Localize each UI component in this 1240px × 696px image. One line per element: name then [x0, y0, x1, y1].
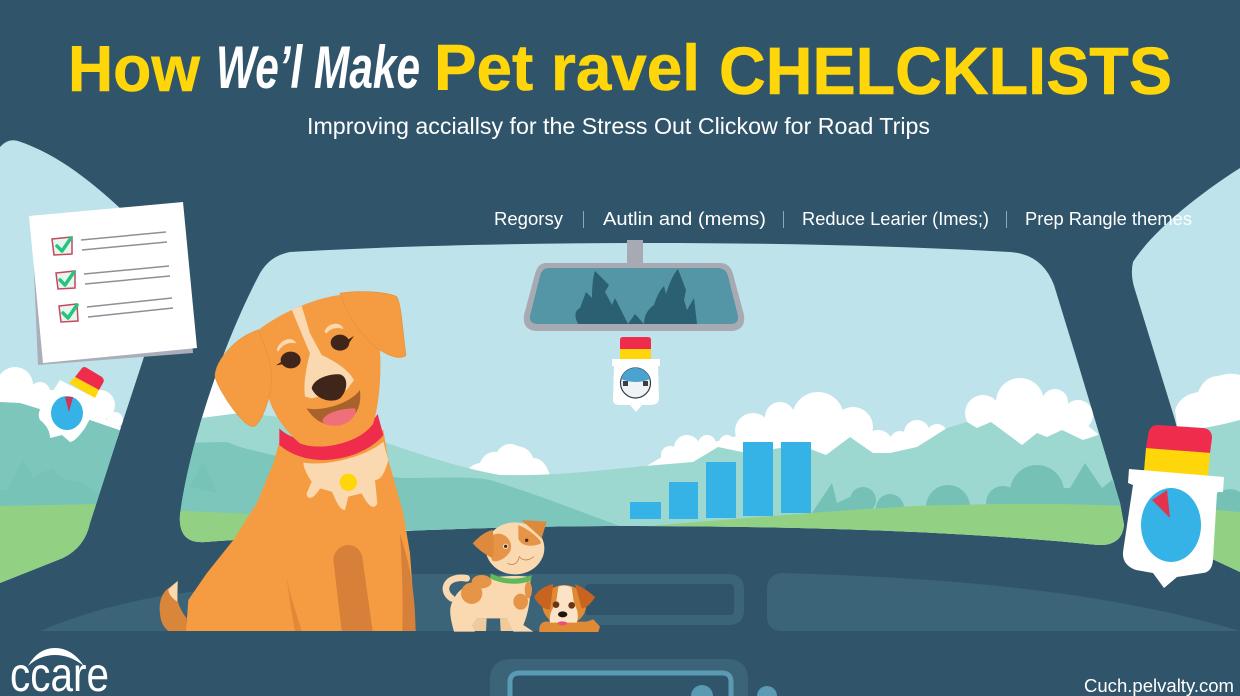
right badge with pie: [1123, 425, 1224, 588]
dashboard radio unit: [490, 659, 777, 696]
hills front: [170, 442, 630, 530]
navigation labels: Reduce Learier (Imes;): [802, 208, 989, 229]
navigation labels: Autlin and (mems): [603, 208, 766, 229]
grass: [0, 504, 1240, 583]
title: Pet ravel: [434, 31, 700, 104]
rear view mirror: [524, 240, 744, 331]
big dog: [160, 292, 416, 631]
navigation labels: Regorsy: [494, 208, 564, 229]
dashboard vent slot: [585, 584, 734, 615]
left window hill: [0, 402, 125, 560]
small puppy: [446, 520, 547, 632]
bar chart: [630, 442, 811, 519]
clouds: [0, 360, 1240, 476]
navigation labels: [494, 208, 1192, 229]
hills back: [180, 414, 1124, 545]
title: We’l Make: [216, 34, 420, 101]
tiny puppy: [534, 584, 600, 632]
right trees: [812, 463, 1240, 513]
title: How: [68, 32, 200, 105]
website url: Cuch.pelvalty.com: [1084, 675, 1234, 696]
windows with landscape: [0, 140, 1240, 583]
checklist paper: [29, 202, 197, 365]
title: [68, 31, 1172, 109]
title: CHELCKLISTS: [719, 34, 1172, 109]
subtitle: Improving acciallsy for the Stress Out Clickow for Road Trips: [307, 113, 930, 139]
dashboard panels: [40, 573, 1240, 631]
trees: [94, 494, 100, 509]
air freshener: [612, 337, 660, 412]
navigation labels: Prep Rangle themes: [1025, 208, 1192, 229]
left badge with pie: [39, 367, 104, 442]
